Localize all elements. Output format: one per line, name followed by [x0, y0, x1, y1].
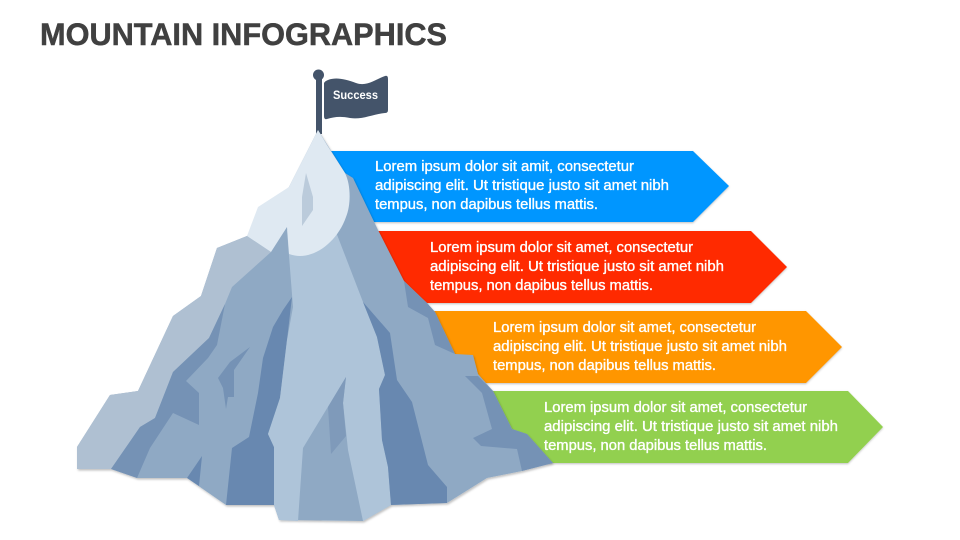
left light face [77, 236, 271, 469]
mountain silhouette [77, 130, 553, 521]
banner: green: tempus, non dapibus tellus mattis. [544, 438, 767, 454]
central left dark face [226, 297, 292, 505]
banner: orange: Lorem ipsum dolor sit amet, consectetur [493, 320, 756, 336]
right dark face [363, 302, 447, 505]
snow crevice [302, 173, 313, 226]
banner: blue [320, 151, 729, 222]
banner: orange [430, 311, 842, 383]
banner: red: tempus, non dapibus tellus mattis. [430, 278, 653, 294]
left crevice [218, 347, 250, 409]
banner: blue: adipiscing elit. Ut tristique justo sit amet nibh [375, 178, 669, 194]
banner: orange: adipiscing elit. Ut tristique justo sit amet nibh [493, 339, 787, 355]
right upper shaded rock [404, 281, 455, 354]
banner: red [370, 231, 787, 303]
banner: red: adipiscing elit. Ut tristique justo sit amet nibh [430, 259, 724, 275]
banner: red: Lorem ipsum dolor sit amet, consectetur [430, 240, 693, 256]
icon: success flag [313, 70, 388, 134]
banner: orange: tempus, non dapibus tellus mattis. [493, 358, 716, 374]
left shaded rock [111, 304, 225, 478]
banner: green [485, 391, 883, 463]
small base rock [187, 456, 202, 486]
banner: blue: Lorem ipsum dolor sit amit, consectetur [375, 159, 634, 175]
snow cap [247, 130, 350, 256]
icon: success flag: Success [333, 88, 378, 102]
right lower shaded rock [465, 376, 553, 471]
central light column [268, 230, 391, 521]
inner rock patch [328, 377, 346, 454]
banner: blue: tempus, non dapibus tellus mattis. [375, 197, 598, 213]
banner: green: adipiscing elit. Ut tristique justo sit amet nibh [544, 419, 838, 435]
title: MOUNTAIN INFOGRAPHICS [40, 16, 447, 52]
banner: green: Lorem ipsum dolor sit amet, consectetur [544, 400, 807, 416]
mountain [77, 130, 553, 521]
